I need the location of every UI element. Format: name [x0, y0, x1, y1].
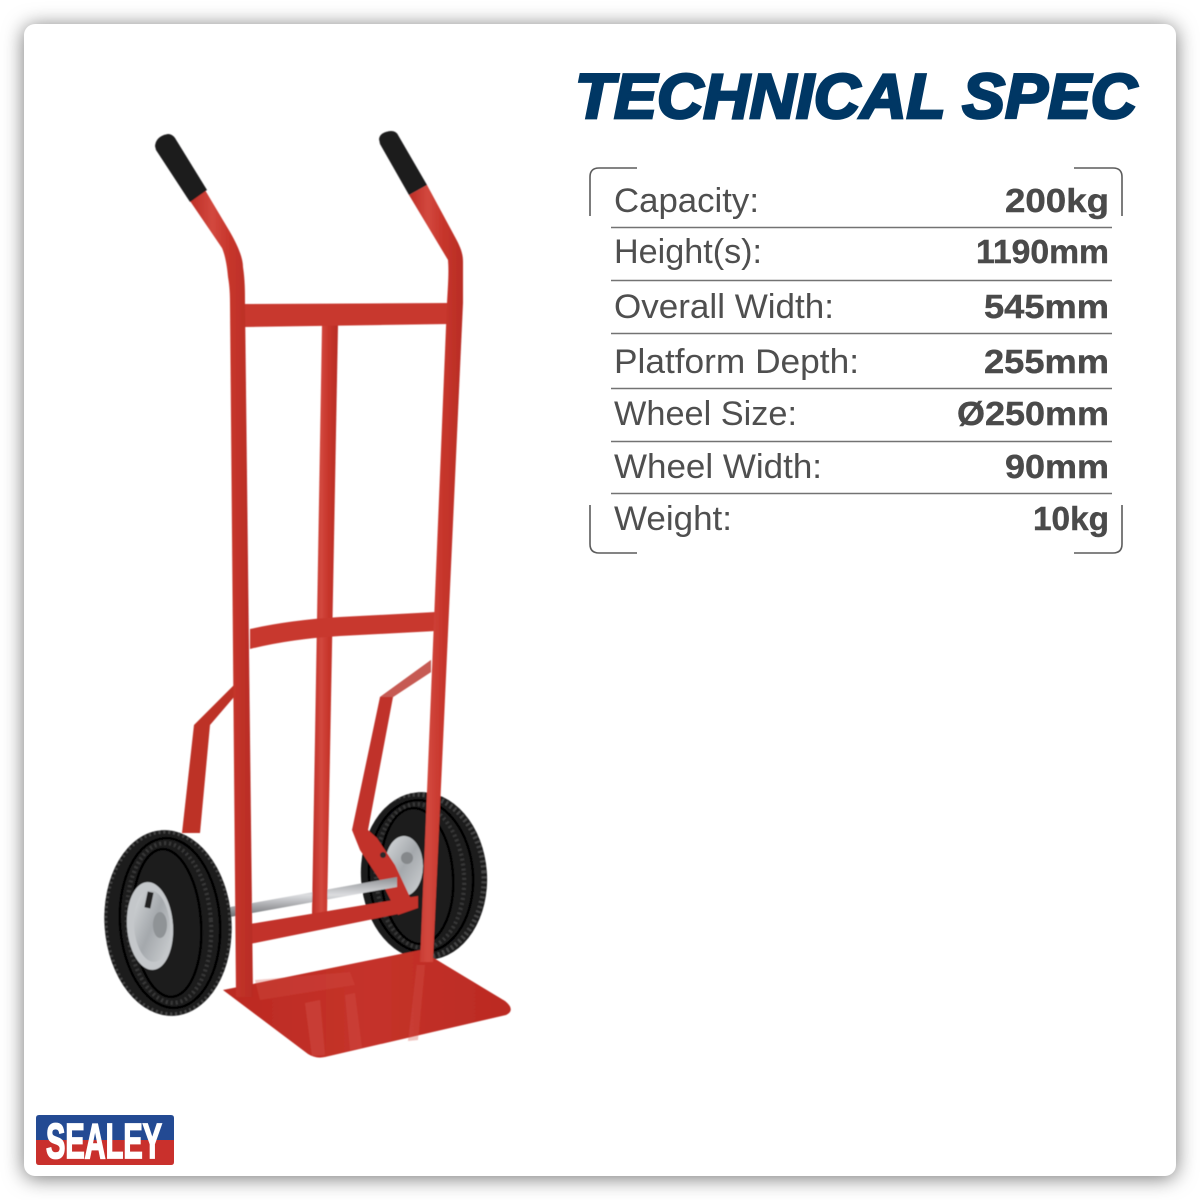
- row: wheel width: Wheel Width:: [614, 448, 822, 486]
- middle curved crossbar: [250, 612, 436, 649]
- centre strut: [312, 325, 338, 915]
- row: weight: 10kg: [1033, 500, 1109, 537]
- row: overall width: 545mm: [984, 288, 1109, 325]
- right tube: [409, 185, 463, 962]
- left handle grip: [155, 134, 207, 202]
- right wheel: [360, 791, 488, 960]
- row: platform depth: Platform Depth:: [614, 343, 859, 381]
- row: wheel size: Ø250mm: [957, 395, 1109, 432]
- row: capacity: Capacity:: [614, 182, 759, 220]
- row: capacity: 200kg: [1005, 182, 1109, 219]
- row: weight: Weight:: [614, 500, 732, 538]
- row: height: 1190mm: [976, 233, 1109, 270]
- row: platform depth: [614, 343, 1109, 381]
- row: overall width: [614, 288, 1109, 326]
- row: capacity: [614, 182, 1109, 220]
- row: platform depth: 255mm: [984, 343, 1109, 380]
- row: height: [614, 233, 1109, 271]
- right brace and bracket: [352, 660, 431, 915]
- lower crossbar: [250, 896, 418, 944]
- row: wheel size: Wheel Size:: [614, 395, 797, 433]
- axle: [230, 877, 397, 917]
- left tube: [190, 190, 253, 997]
- row dividers: [611, 228, 1112, 494]
- title: TECHNICAL SPEC: [575, 62, 1139, 132]
- Sealey logo: [36, 1115, 174, 1169]
- top crossbar: [244, 303, 449, 327]
- spec table: [590, 168, 1122, 553]
- row: overall width: Overall Width:: [614, 288, 834, 326]
- left brace: [182, 685, 234, 833]
- row: wheel width: [614, 448, 1109, 486]
- table corner brackets: [590, 168, 1122, 553]
- row: weight: [614, 500, 1109, 538]
- sack truck product illustration: [98, 131, 511, 1058]
- row: height: Height(s):: [614, 233, 762, 271]
- logo red band: [36, 1140, 174, 1165]
- row: wheel size: [614, 395, 1109, 433]
- logo blue band: [36, 1115, 174, 1140]
- logo wordmark: SEALEY: [46, 1115, 162, 1169]
- left wheel: [98, 826, 238, 1020]
- right handle grip: [379, 131, 427, 195]
- row: wheel width: 90mm: [1005, 448, 1109, 485]
- platform: [223, 950, 511, 1058]
